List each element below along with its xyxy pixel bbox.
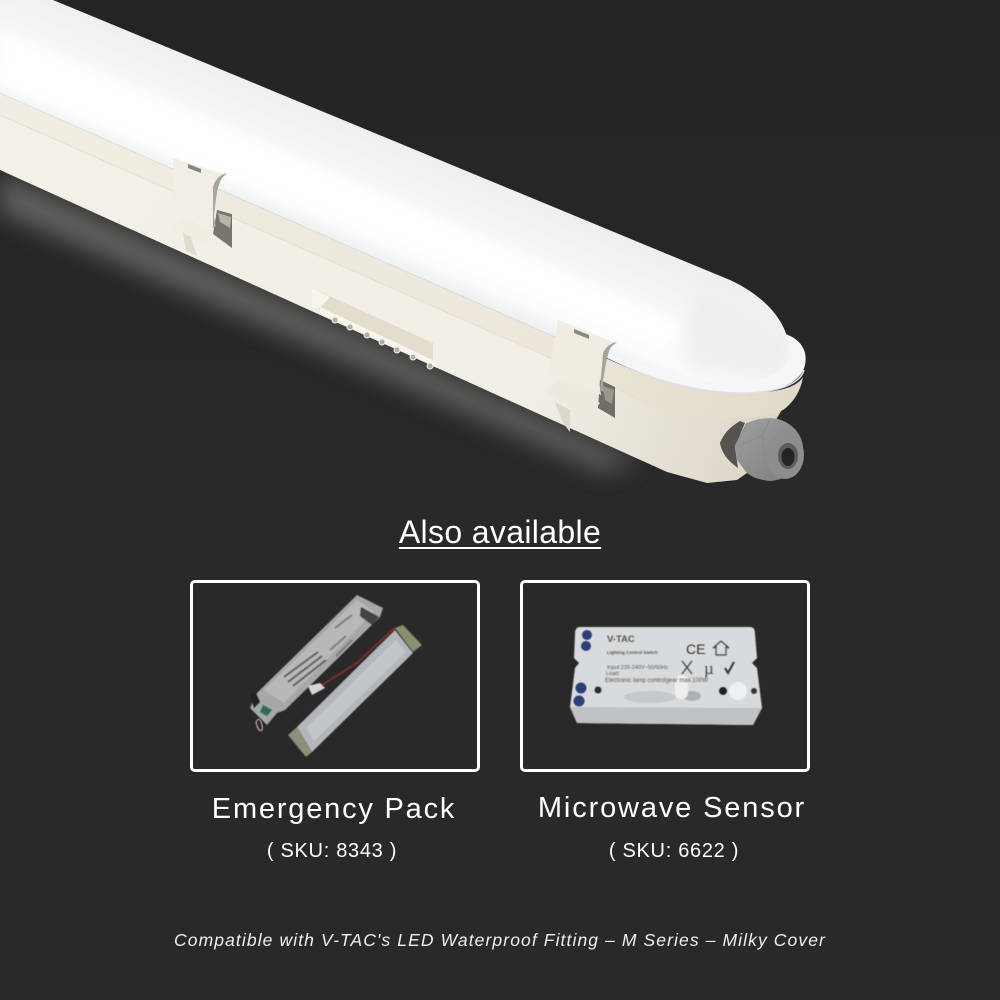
panel: emergency pack image xyxy=(190,580,480,772)
label: Emergency Pack SKU: ( SKU: 8343 ) xyxy=(267,840,397,862)
icon: microwave sensor module xyxy=(569,626,763,726)
label: Microwave Sensor: Microwave Sensor xyxy=(538,792,806,824)
beige band under cover xyxy=(0,93,803,418)
label: Emergency Pack: Emergency Pack xyxy=(212,793,456,825)
heading: Also available: Also available xyxy=(399,514,601,550)
vent teeth xyxy=(332,317,433,369)
cable gland xyxy=(720,418,804,481)
icon: microwave sensor module: V-TAC xyxy=(607,634,635,645)
vent slot xyxy=(312,288,437,369)
panel: microwave sensor image xyxy=(520,580,810,772)
right clip xyxy=(547,320,617,432)
light glow under fitting xyxy=(0,172,640,470)
left clip xyxy=(173,158,232,256)
milky cover xyxy=(0,0,806,393)
icon: microwave sensor module: Lighting Control Switch xyxy=(607,650,658,655)
icon: microwave sensor module: Input:220-240V~50/60Hz xyxy=(607,665,669,671)
icon: microwave sensor module: Electronic lamp controlgear max.100W xyxy=(605,678,708,684)
label: Microwave Sensor SKU: ( SKU: 6622 ) xyxy=(609,840,739,862)
product illustration: LED waterproof fitting xyxy=(0,0,806,483)
cover rim xyxy=(603,300,806,393)
icon: microwave sensor module: µ xyxy=(704,659,714,678)
fitting body xyxy=(0,93,803,483)
footnote: compatibility note: Compatible with V-TAC's LED Waterproof Fitting – M Series – Milky Cover xyxy=(174,930,826,950)
icon: emergency pack driver and battery xyxy=(250,594,422,758)
icon: microwave sensor module: Load: xyxy=(606,671,620,677)
icon: microwave sensor module: CE xyxy=(686,641,705,657)
